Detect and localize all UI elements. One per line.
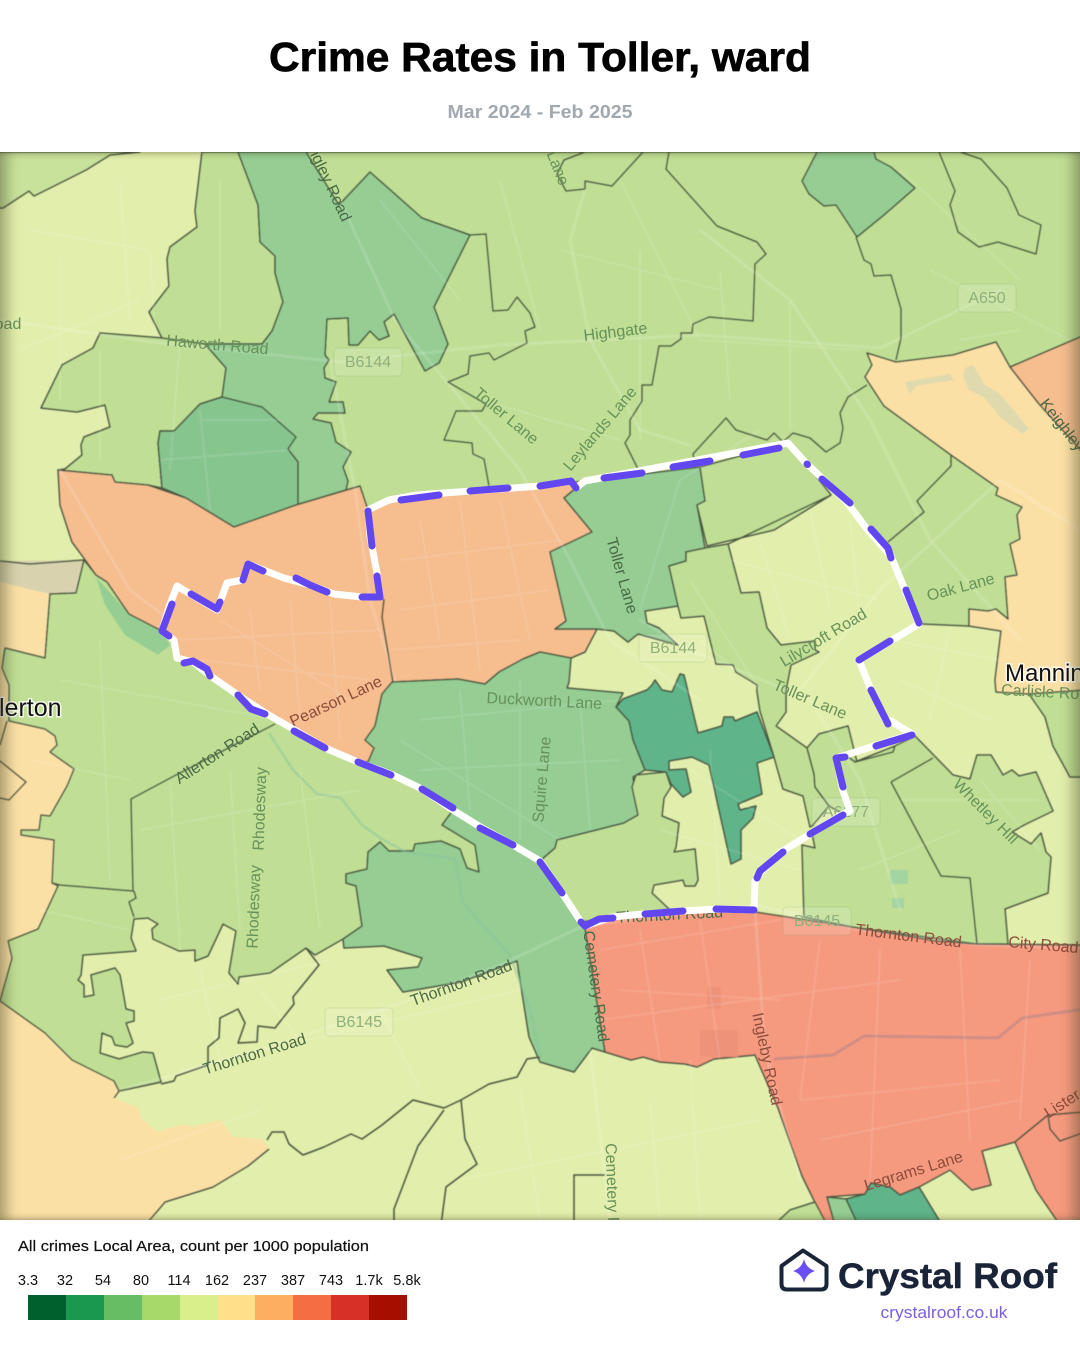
legend scale labels: 387 [281,1273,305,1289]
road labels: Thornton Road [616,904,724,927]
road labels: Toller Lane [770,677,849,723]
road labels: Toller Lane [470,385,541,448]
road shields: B6145 [794,913,840,930]
road labels: Cemetery R [602,1143,621,1229]
legend colour swatches [28,1295,407,1320]
road labels: Thornton Road [855,922,963,951]
road labels: City Road [1008,934,1079,957]
road labels: Pearson Lane [287,673,385,731]
road labels: ngley Road [304,144,354,224]
legend scale labels: 5.8k [393,1273,421,1289]
logo wordmark: Crystal Roof [838,1257,1057,1296]
legend scale labels [18,1273,421,1289]
legend scale labels: 80 [133,1273,149,1289]
road labels: Squire Lane [530,736,555,823]
legend scale labels: 3.3 [18,1273,38,1289]
road labels: Ingleby Road [748,1011,785,1107]
road labels: Whetley Hill [949,776,1021,848]
road labels: Toller Lane [602,536,640,616]
legend title: All crimes Local Area, count per 1000 population [18,1239,369,1255]
road labels: Allerton Road [172,721,263,788]
road labels: Oak Lane [925,570,997,605]
road labels: Legrams Lane [862,1149,965,1195]
road shields: B6145 [336,1014,382,1031]
legend scale labels: 114 [167,1273,191,1289]
road labels: Leylands Lane [561,384,641,474]
road labels: Thornton Road [201,1031,308,1078]
website url: crystalroof.co.uk [880,1304,1008,1322]
logo: Crystal Roof [782,1250,1057,1322]
map edge vignette [0,152,1080,1220]
road labels: Duckworth Lane [486,690,603,713]
legend scale labels: 32 [57,1273,73,1289]
road labels: Lilycroft Road [777,606,870,671]
road shields: B6144 [345,354,391,371]
road labels: Haworth Road [166,333,269,358]
road labels: Lane [543,149,572,188]
icon: house with star [782,1250,826,1290]
subtitle: date range: Mar 2024 - Feb 2025 [448,101,632,122]
road shields: B6144 [650,640,696,657]
legend scale labels: 1.7k [355,1273,383,1289]
ward boundary: Toller [162,443,919,926]
title: Crime Rates in Toller, ward [269,34,811,80]
road labels: Thornton Road [408,958,515,1010]
legend scale labels: 54 [95,1273,111,1289]
road shields: A6177 [823,804,869,821]
road labels: Cemetery Road [579,930,612,1043]
road shields [325,284,1016,1036]
legend scale labels: 743 [319,1273,343,1289]
legend [18,1239,421,1320]
road shields: A650 [968,290,1006,307]
legend scale labels: 162 [205,1273,229,1289]
place label: Allerton: lerton [0,694,62,722]
road labels: Highgate [583,320,648,345]
road labels: Rhodesway [251,767,270,851]
road labels: Carlisle Ro [1001,682,1080,703]
road labels: Rhodesway [245,865,264,949]
legend scale labels: 237 [243,1273,267,1289]
